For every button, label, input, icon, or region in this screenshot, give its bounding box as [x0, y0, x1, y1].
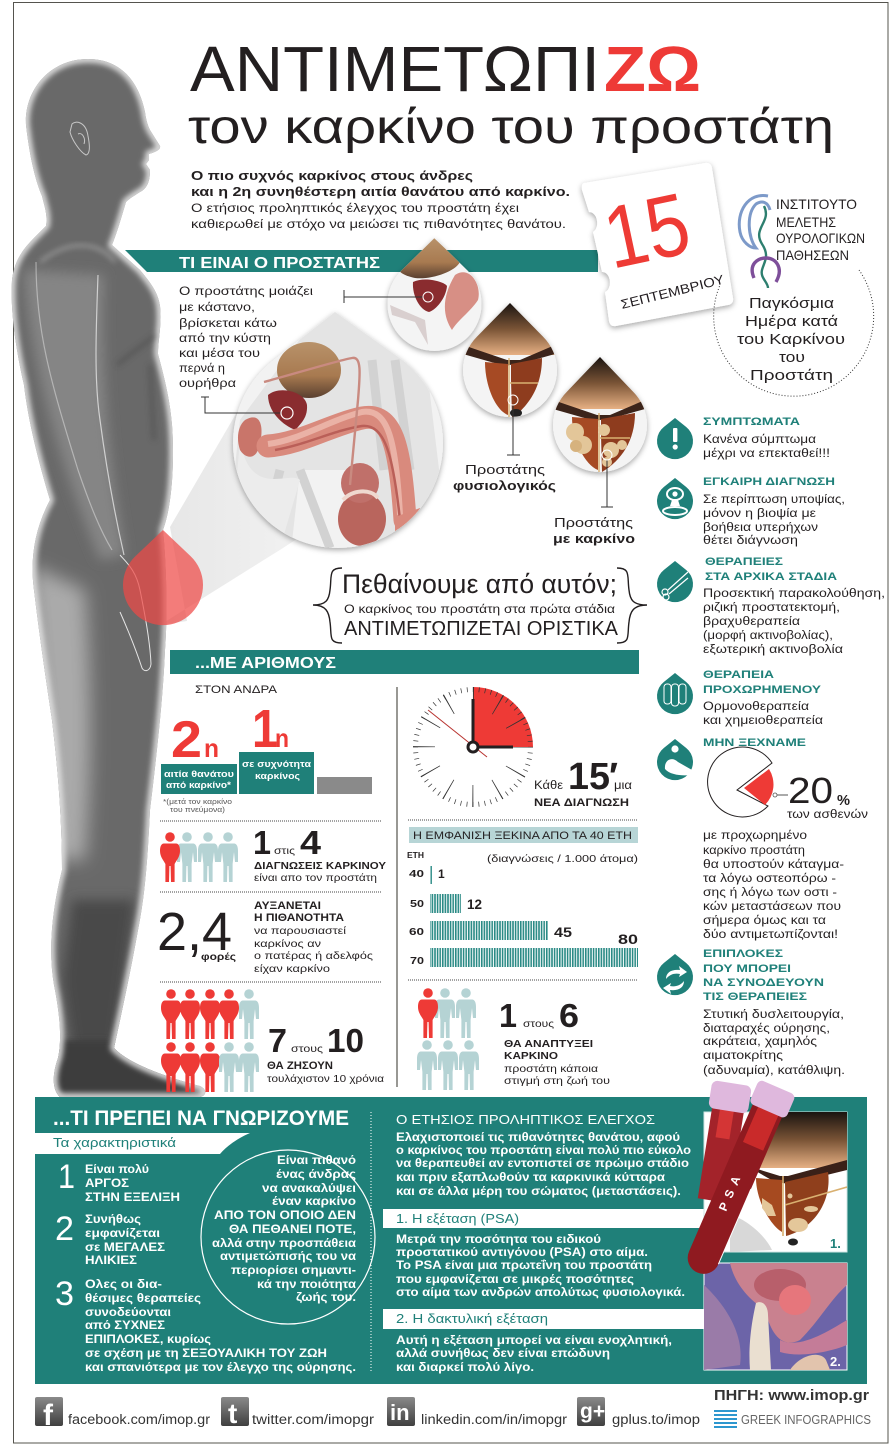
circle callout: αντιμετώπισής του να — [220, 1251, 356, 1263]
prostate description: ουρήθρα — [179, 378, 236, 390]
list: characteristics: Είναι πολύ — [85, 1164, 149, 1176]
text: annual screening: Ο ΕΤΗΣΙΟΣ ΠΡΟΛΗΠΤΙΚΟΣ ΕΛΕΓΧΟΣ — [396, 1112, 655, 1127]
text: annual screening: ο καρκίνος του προστάτη είναι πολύ πιο εύκολο — [396, 1145, 691, 1157]
icon: early diagnosis ultrasound drop — [657, 478, 693, 519]
rectum — [238, 417, 262, 457]
stat: 7 of 10 — [267, 1022, 384, 1085]
label: in men: ΣΤΟΝ ΑΝΔΡΑ — [195, 684, 278, 696]
bar chart: diagnoses by age — [407, 827, 638, 967]
callout: do we die from it: ΑΝΤΙΜΕΤΩΠΙΖΕΤΑΙ ΟΡΙΣΤΙΚΑ — [344, 618, 619, 640]
list: characteristics: εμφανίζεται — [85, 1228, 160, 1240]
prostate description: από την κύστη — [179, 333, 271, 345]
text: early diagnosis: βοήθεια υπερήχων — [703, 522, 818, 534]
testis — [338, 492, 386, 546]
stat: 2.4 times: είχαν καρκίνο — [254, 963, 330, 975]
intro text — [191, 168, 570, 231]
footnote: *(μετά τον καρκίνο — [163, 798, 232, 806]
logo: institute emblem — [739, 195, 865, 288]
list: characteristics: Συνήθως — [85, 1214, 141, 1226]
title: ΑΝΤΙΜΕΤΩΠΙ — [190, 33, 600, 105]
text: complications: ΤΙΣ ΘΕΡΑΠΕΙΕΣ — [703, 991, 807, 1003]
social: linkedin: linkedin.com/in/imopgr — [421, 1412, 568, 1427]
subheading bar: PSA test — [383, 1209, 704, 1228]
text: complications: ΠΟΥ ΜΠΟΡΕΙ — [703, 963, 791, 975]
text: early treatment: Προσεκτική παρακολούθηση, — [703, 588, 885, 600]
text: complications — [703, 948, 845, 1077]
stat: 1 in 6: ΚΑΡΚΙΝΟ — [504, 1050, 558, 1062]
circle callout: περιορίσει σημαντι- — [231, 1265, 356, 1277]
text: annual screening: και πριν εξαπλωθούν τα καρκινικά κύτταρα — [396, 1172, 665, 1184]
heading: do not forget: ΜΗΝ ΞΕΧΝΑΜΕ — [703, 737, 806, 749]
text: PSA test: προστατικού αντιγόνου (PSA) στο αίμα. — [396, 1247, 648, 1259]
bar chart: diagnoses by age: 1 — [438, 867, 445, 881]
zoom cone from body to illustration — [160, 312, 443, 625]
social: facebook: f — [43, 1399, 54, 1432]
red highlight drop on pelvis — [123, 530, 203, 625]
text: complications: ΝΑ ΣΥΝΟΔΕΥΟΥΝ — [703, 977, 824, 989]
text: fractures: με προχωρημένο — [703, 830, 807, 842]
source line: ΠΗΓΗ: www.imop.gr — [714, 1387, 869, 1404]
text: complications: ΕΠΙΠΛΟΚΕΣ — [703, 948, 783, 960]
text: annual screening: να θεραπευθεί αν εντοπιστεί σε πρώιμο στάδιο — [396, 1158, 689, 1170]
dotted circle: world day: του Καρκίνου — [737, 331, 845, 348]
bar chart: diagnoses by age: ΕΤΗ — [407, 851, 424, 860]
circle callout: Είναι πιθανό — [277, 1155, 356, 1167]
list: characteristics: από ΣΥΧΝΕΣ — [85, 1320, 165, 1332]
list: characteristics: σε ΜΕΓΑΛΕΣ — [85, 1242, 165, 1254]
title accent: ΖΩ — [604, 33, 701, 105]
section bar: by the numbers — [170, 650, 639, 674]
list: characteristics: ΑΡΓΟΣ — [85, 1178, 129, 1190]
intro text: Ο ετήσιος προληπτικός έλεγχος του προστάτη έχει — [191, 201, 519, 215]
callout: do we die from it — [313, 568, 647, 643]
list: characteristics: 2 — [55, 1210, 74, 1248]
text: early treatment: βραχυθεραπεία — [703, 616, 800, 628]
bar chart: diagnoses by age: Η ΕΜΦΑΝΙΣΗ ΞΕΚΙΝΑ ΑΠΟ ΤΑ 40 ΕΤΗ — [413, 830, 632, 842]
stat: 7 of 10: 7 — [268, 1022, 287, 1059]
image box 1: prostate with cancer section — [704, 1112, 847, 1252]
stat: 2.4 times: 2,4 — [157, 902, 232, 962]
urethra and penis — [268, 417, 405, 520]
text: early treatment — [703, 556, 885, 656]
stat: 1 in 4: 1 — [253, 824, 271, 861]
logo text: ΠΑΘΗΣΕΩΝ — [776, 247, 849, 263]
list: characteristics: συνοδεύονται — [85, 1307, 171, 1319]
subheading bar: digital exam — [383, 1309, 704, 1329]
stat: every 15 minutes: Κάθε — [534, 778, 564, 792]
illustration: normal prostate drop — [460, 303, 560, 455]
text: complications: αιματοκρίτης — [703, 1050, 784, 1062]
stat: 2.4 times: φορές — [201, 952, 236, 963]
text: early treatment: ριζική προστατεκτομή, — [703, 602, 840, 614]
text: advanced treatment: Ορμονοθεραπεία — [703, 701, 809, 713]
podium chart: ranking: n — [275, 723, 289, 753]
stat: 7 of 10: ΘΑ ΖΗΣΟΥΝ — [267, 1060, 333, 1072]
social: facebook: facebook.com/imop.gr — [68, 1412, 211, 1427]
stat: 1 in 4: 4 — [300, 824, 322, 861]
prostate description — [179, 286, 314, 390]
label: prostate with cancer: Προστάτης — [554, 515, 633, 530]
bar chart: diagnoses by age: 40 — [409, 869, 425, 880]
pie chart: 20 percent: των ασθενών — [787, 807, 868, 821]
dotted circle: world day: Παγκόσμια — [749, 295, 834, 312]
text: symptoms: Κανένα σύμπτωμα — [703, 434, 816, 446]
social: twitter — [221, 1397, 375, 1429]
prostate description: με κάστανο, — [179, 302, 255, 314]
stat: 2.4 times: να παρουσιαστεί — [254, 925, 347, 937]
social: linkedin — [387, 1397, 568, 1427]
text: fractures: τα λόγω οστεοπόρω - — [703, 873, 836, 885]
dotted circle: world day: του — [779, 349, 805, 366]
pictogram: 1 in 4 — [160, 832, 238, 882]
text: fractures — [703, 830, 844, 941]
stat: 1 in 4: ΔΙΑΓΝΩΣΕΙΣ ΚΑΡΚΙΝΟΥ — [254, 861, 386, 872]
text: symptoms: ΣΥΜΠΤΩΜΑΤΑ — [703, 416, 800, 428]
stat: 1 in 6: 6 — [559, 997, 579, 1034]
stat: 2.4 times: ο πατέρας ή αδελφός — [254, 950, 373, 962]
text: early treatment: εξωτερική ακτινοβολία — [703, 644, 843, 656]
stat: 1 in 4: στις — [274, 846, 295, 857]
label: normal prostate: φυσιολογικός — [453, 478, 556, 493]
text: early diagnosis: μόνον η βιοψία με — [703, 508, 816, 520]
text: annual screening: Ελαχιστοποιεί τις πιθανότητες θανάτου, αφού — [396, 1132, 680, 1144]
pie chart: 20 percent — [708, 747, 868, 821]
bottom panel: what we should know — [35, 1097, 867, 1384]
social: twitter: twitter.com/imopgr — [252, 1412, 375, 1427]
circle callout — [35, 1133, 375, 1324]
text: fractures: σης ή λόγω των οστι - — [703, 887, 837, 899]
list: characteristics: και σπανιότερα με τον έλεγχο της ούρησης. — [85, 1362, 356, 1374]
image number 1: 1. — [830, 1236, 841, 1251]
footnote — [163, 798, 232, 814]
podium: second: αιτία θανάτου — [164, 769, 234, 779]
bar chart: diagnoses by age: 70 — [410, 956, 425, 967]
social: linkedin: in — [390, 1400, 410, 1425]
heading: by the numbers: ...ΜΕ ΑΡΙΘΜΟΥΣ — [195, 655, 336, 672]
callout: do we die from it: Ο καρκίνος του προστάτη στα πρώτα στάδια — [344, 603, 615, 616]
text: annual screening: και σε άλλα μέρη του σώματος (μεταστάσεις). — [396, 1186, 681, 1198]
intro text: καθιερωθεί με στόχο να μειώσει τις πιθανότητες θανάτου. — [191, 217, 566, 231]
list: characteristics: 3 — [55, 1275, 74, 1313]
text: symptoms — [703, 416, 830, 460]
text: fractures: θα υποστούν κάταγμα- — [703, 859, 844, 871]
stat: 2.4 times: ΑΥΞΑΝΕΤΑΙ — [254, 900, 321, 912]
stat: every 15 minutes — [534, 756, 632, 809]
text: fractures: δύο αντιμετωπίζονται! — [703, 929, 838, 941]
stat: every 15 minutes: ΝΕΑ ΔΙΑΓΝΩΣΗ — [534, 797, 629, 809]
text: early treatment: ΘΕΡΑΠΕΙΕΣ — [705, 556, 783, 568]
podium: second — [161, 764, 237, 794]
bar chart: diagnoses by age: 50 — [410, 899, 425, 910]
illustration: prostate with cancer drop — [550, 357, 650, 507]
list: characteristics — [55, 1158, 356, 1374]
stat: 7 of 10: 10 — [327, 1022, 364, 1059]
podium: first — [239, 752, 314, 794]
heading: what is the prostate: ΤΙ ΕΙΝΑΙ Ο ΠΡΟΣΤΑΤΗΣ — [179, 255, 380, 272]
stat: 1 in 6: 1 — [499, 997, 517, 1034]
text: PSA test: που εμφανίζεται σε μικρές ποσότητες — [396, 1274, 634, 1286]
stat: 1 in 6: προστάτη κάποια — [504, 1063, 598, 1075]
text: advanced treatment: ΘΕΡΑΠΕΙΑ — [703, 669, 774, 681]
subheading bar: digital exam: 2. Η δακτυλική εξέταση — [396, 1311, 548, 1326]
stat: 1 in 4 — [253, 824, 386, 884]
subtitle: τον καρκίνο του προστάτη — [188, 101, 834, 154]
marker line: prostate location — [344, 290, 423, 303]
vas deferens — [264, 358, 360, 485]
intro text: Ο πιο συχνός καρκίνος στους άνδρες — [191, 168, 473, 183]
text: early diagnosis: ΕΓΚΑΙΡΗ ΔΙΑΓΝΩΣΗ — [703, 476, 835, 488]
bar chart: diagnoses by age: 80 — [618, 931, 638, 947]
podium chart: ranking: 1 — [252, 699, 278, 759]
text: PSA test: Μετρά την ποσότητα του ειδικού — [396, 1234, 601, 1246]
bar chart: diagnoses by age: (διαγνώσεις / 1.000 άτομα) — [487, 853, 638, 865]
podium chart: ranking: n — [204, 733, 219, 763]
podium chart: ranking: 2 — [171, 711, 202, 769]
logo text: ΜΕΛΕΤΗΣ — [776, 214, 836, 230]
list: characteristics: ΕΠΙΠΛΟΚΕΣ, κυρίως — [85, 1334, 211, 1346]
bar chart: diagnoses by age: 12 — [467, 896, 482, 912]
social: google plus: g+ — [580, 1400, 605, 1423]
list: characteristics: 1 — [58, 1158, 75, 1196]
stat: every 15 minutes: μια — [614, 778, 632, 792]
subheading: characteristics: Τα χαρακτηριστικά — [53, 1136, 176, 1150]
hand outline — [120, 555, 151, 671]
logo text — [776, 196, 865, 263]
text: early treatment: (μορφή ακτινοβολίας), — [703, 630, 833, 642]
image number 2: 2. — [830, 1354, 841, 1369]
prostate description: περνά η — [179, 363, 225, 375]
text: advanced treatment: και χημειοθεραπεία — [703, 715, 823, 727]
text: fractures: σήμερα όμως και τα — [703, 915, 826, 927]
circle callout: ΘΑ ΠΕΘΑΝΕΙ ΠΟΤΕ, — [229, 1224, 356, 1236]
pie chart: 20 percent: 20 — [788, 770, 833, 811]
text: PSA test: στο αίμα των ανδρών απολύτως φυσιολογικά. — [396, 1287, 685, 1299]
stat: 1 in 6: στιγμή στη ζωή του — [504, 1075, 610, 1087]
text: symptoms: μέχρι να επεκταθεί!!! — [703, 448, 830, 460]
brand: Greek Infographics: GREEK INFOGRAPHICS — [741, 1412, 871, 1427]
podium chart: ranking — [161, 699, 372, 814]
circle callout: κά την ποιότητα — [257, 1279, 356, 1291]
callout: do we die from it: Πεθαίνουμε από αυτόν; — [342, 569, 617, 599]
glans — [395, 508, 420, 531]
pie chart: 20 percent: % — [837, 792, 850, 809]
text: fractures: κών μεταστάσεων που — [703, 901, 841, 913]
social: google plus — [577, 1397, 700, 1427]
prostate description: Ο προστάτης μοιάζει — [179, 286, 314, 298]
text: advanced treatment: ΠΡΟΧΩΡΗΜΕΝΟΥ — [703, 684, 822, 696]
circle callout: ένας άνδρας — [276, 1169, 356, 1181]
month label: ΣΕΠΤΕΜΒΡΙΟΥ — [619, 272, 726, 312]
calendar card: 15 September — [582, 163, 733, 326]
stat: 7 of 10: στους — [291, 1044, 323, 1055]
marker line: normal prostate — [507, 405, 520, 455]
dotted circle: world day: Προστάτη — [750, 367, 833, 384]
list: characteristics: Ολες οι δια- — [85, 1279, 162, 1291]
label: prostate with cancer — [553, 515, 635, 546]
prostate description: βρίσκεται κάτω — [179, 318, 277, 330]
icon: symptoms exclamation drop — [657, 418, 693, 459]
pictogram: 7 of 10 — [161, 989, 259, 1092]
podium: first: καρκίνος — [255, 771, 300, 781]
podium: third — [317, 777, 372, 794]
list: characteristics: θέσιμες θεραπείες — [85, 1293, 201, 1305]
stat: 1 in 4: είναι απο τον προστάτη — [254, 872, 377, 884]
text: PSA test — [396, 1234, 685, 1299]
illustration: prostate drop 1 — [344, 238, 481, 351]
marker line: prostate in large drop — [201, 397, 281, 413]
icon: ear outline — [70, 122, 89, 155]
text: complications: Στυτική δυσλειτουργία, — [703, 1009, 844, 1021]
illustration: large anatomy drop — [201, 312, 450, 560]
circle callout: ζωής του. — [296, 1292, 356, 1304]
text: digital exam: αλλά συνήθως δεν είναι επώδυνη — [396, 1348, 610, 1360]
icon: complications arrows drop — [657, 954, 693, 995]
text: digital exam — [396, 1335, 672, 1374]
stat: 2.4 times: Η ΠΙΘΑΝΟΤΗΤΑ — [254, 912, 344, 924]
tube label: PSA — [716, 1168, 746, 1213]
social: twitter: t — [228, 1398, 237, 1429]
blood tubes labelled PSA — [679, 1079, 796, 1280]
logo text: ΙΝΣΤΙΤΟΥΤΟ — [776, 196, 857, 212]
circle callout: να ανακαλύψει — [262, 1183, 356, 1195]
intro text: και η 2η συνηθέστερη αιτία θανάτου από καρκίνο. — [191, 184, 570, 199]
bar chart: diagnoses by age: 45 — [554, 924, 572, 940]
social: facebook — [35, 1397, 211, 1432]
circle callout: αλλά στην προσπάθεια — [212, 1238, 356, 1250]
section bar: what is the prostate — [125, 250, 598, 272]
stat: 1 in 6 — [499, 997, 610, 1087]
stat: 7 of 10: τουλάχιστον 10 χρόνια — [267, 1073, 384, 1085]
icon: do not forget patient drop — [657, 739, 693, 780]
text: early treatment: ΣΤΑ ΑΡΧΙΚΑ ΣΤΑΔΙΑ — [705, 571, 837, 583]
title — [188, 33, 834, 154]
bar chart: diagnoses by age: 60 — [409, 927, 425, 938]
pictogram: 1 in 6 — [417, 988, 479, 1090]
date number: 15 — [595, 173, 698, 288]
text: complications: διαταραχές ούρησης, — [703, 1023, 830, 1035]
label: normal prostate: Προστάτης — [465, 462, 545, 477]
prostate — [268, 390, 307, 430]
icon: advanced treatment test tubes drop — [657, 673, 693, 714]
circle callout: έναν καρκίνο — [272, 1196, 356, 1208]
stat: every 15 minutes: 15 — [568, 756, 610, 798]
text: advanced treatment — [703, 669, 823, 727]
text: complications: (αδυναμία), κατάθλιψη. — [703, 1065, 845, 1077]
figure: standing man in profile — [12, 59, 206, 1097]
label: normal prostate — [453, 462, 556, 493]
stat: 2.4 times: καρκίνος αν — [254, 938, 321, 950]
text: fractures: καρκίνο προστάτη — [703, 845, 805, 857]
stat: 1 in 6: στους — [523, 1019, 554, 1030]
label: prostate with cancer: με καρκίνο — [553, 531, 635, 546]
icon: early treatment scissors drop — [657, 561, 693, 602]
marker line: cancerous prostate — [601, 460, 613, 507]
prostate description: και μέσα του — [179, 348, 260, 360]
list: characteristics: ΣΤΗΝ ΕΞΕΛΙΞΗ — [85, 1192, 180, 1204]
logo text: ΟΥΡΟΛΟΓΙΚΩΝ — [776, 230, 865, 246]
footnote: του πνεύμονα) — [170, 806, 225, 814]
stat: every 15 minutes: ′ — [609, 756, 618, 798]
text: complications: ακράτεια, χαμηλός — [703, 1036, 818, 1048]
image box 2: digital exam anatomy — [704, 1263, 847, 1370]
text: digital exam: και διαρκεί πολύ λίγο. — [396, 1362, 534, 1374]
podium: first: σε συχνότητα — [242, 759, 312, 769]
clock: every 15 minutes — [416, 687, 533, 804]
circle callout: ΑΠΟ ΤΟΝ ΟΠΟΙΟ ΔΕΝ — [214, 1210, 356, 1222]
dotted circle: world day — [714, 270, 874, 396]
stat: 1 in 6: ΘΑ ΑΝΑΠΤΥΞΕΙ — [504, 1038, 593, 1050]
text: early diagnosis — [703, 476, 845, 547]
bladder — [277, 342, 341, 398]
text: digital exam: Αυτή η εξέταση μπορεί να είναι ενοχλητική, — [396, 1335, 672, 1347]
list: characteristics: σε σχέση με τη ΣΕΞΟΥΑΛΙΚΗ ΤΟΥ ΖΩΗ — [85, 1348, 327, 1360]
list: characteristics: ΗΛΙΚΙΕΣ — [85, 1255, 137, 1267]
subheading bar: PSA test: 1. Η εξέταση (PSA) — [396, 1211, 519, 1226]
social: google plus: gplus.to/imop — [612, 1412, 700, 1427]
dotted circle: world day: Ημέρα κατά — [745, 313, 838, 330]
text: early diagnosis: θέτει διάγνωση — [703, 535, 798, 547]
text: PSA test: Το PSA είναι μια πρωτεΐνη του προστάτη — [396, 1260, 652, 1272]
podium: second: από καρκίνο* — [166, 780, 232, 790]
text: early diagnosis: Σε περίπτωση υποψίας, — [703, 494, 845, 506]
heading: what we should know: ...ΤΙ ΠΡΕΠΕΙ ΝΑ ΓΝΩΡΙΖΟΥΜΕ — [53, 1107, 349, 1130]
stat: 2.4 times — [157, 900, 373, 975]
text: annual screening — [396, 1112, 691, 1198]
